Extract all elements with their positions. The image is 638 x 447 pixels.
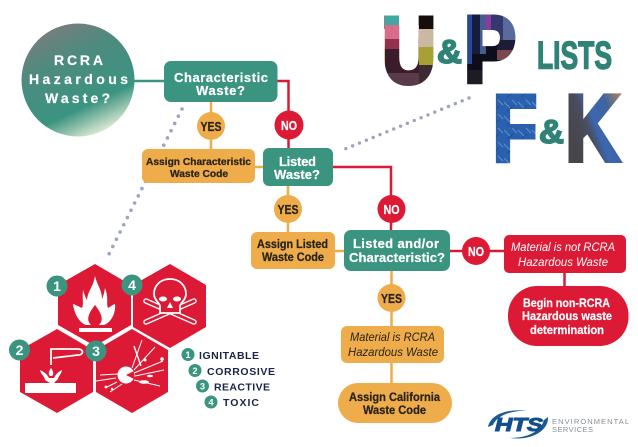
number badge 2 bbox=[9, 340, 30, 360]
number badge 1 bbox=[46, 276, 68, 296]
legend item: reactive: REACTIVE bbox=[214, 382, 270, 394]
red connectors bbox=[277, 81, 564, 287]
heading: F & K: & bbox=[539, 113, 564, 150]
legend item: reactive bbox=[196, 380, 270, 394]
next step: Assign California Waste Code: Waste Code bbox=[363, 403, 426, 417]
no badge 1: NO bbox=[281, 118, 297, 133]
decision: Characteristic Waste? bbox=[164, 61, 278, 102]
dotted leader: lists bbox=[345, 98, 469, 149]
decision: Listed Waste?: Listed bbox=[279, 154, 316, 169]
hexagon: ignitable bbox=[58, 264, 131, 346]
action: Assign Characteristic Waste Code: Assign Characteristic bbox=[146, 156, 251, 168]
next step: Begin non-RCRA determination: determination bbox=[530, 323, 604, 337]
start circle: RCRA Hazardous Waste? bbox=[22, 24, 134, 136]
legend bbox=[182, 348, 275, 409]
legend item: ignitable bbox=[182, 348, 259, 362]
legend item: toxic: 4 bbox=[208, 398, 214, 408]
start circle: RCRA Hazardous Waste?: Hazardous bbox=[29, 71, 128, 87]
no badge 3 bbox=[462, 237, 490, 265]
number badge 3 bbox=[86, 340, 106, 362]
next step: Begin non-RCRA determination: Begin non-RCRA bbox=[523, 296, 610, 310]
orange connectors bbox=[211, 102, 392, 384]
legend item: reactive: 3 bbox=[200, 382, 205, 392]
teal connector: start to characteristic bbox=[133, 80, 165, 82]
next step: Assign California Waste Code: Assign California bbox=[349, 390, 440, 404]
result: Material is not RCRA Hazardous Waste bbox=[504, 235, 626, 273]
heading: U & P Lists: U bbox=[382, 0, 436, 102]
yes badge 2: YES bbox=[278, 202, 299, 217]
number badge 2: 2 bbox=[16, 342, 24, 358]
action: Assign Listed Waste Code: Assign Listed bbox=[257, 237, 328, 251]
no badge 2: NO bbox=[384, 202, 400, 217]
action: Assign Characteristic Waste Code bbox=[142, 149, 255, 183]
yes badge 3: YES bbox=[381, 291, 402, 306]
logo: HTS Environmental Services: ENVIRONMENTAL bbox=[552, 417, 629, 426]
no badge 2 bbox=[378, 195, 406, 223]
result: Material is not RCRA Hazardous Waste: Hazardous Waste bbox=[518, 255, 608, 269]
heading: U & P Lists: & bbox=[437, 33, 462, 70]
logo: HTS Environmental Services: HTS bbox=[495, 415, 543, 435]
action: Assign Listed Waste Code bbox=[251, 232, 335, 269]
no badge 3: NO bbox=[468, 244, 484, 259]
hexagon: reactive bbox=[96, 329, 168, 413]
decision: Listed Waste? bbox=[263, 148, 333, 186]
decision: Characteristic Waste?: Characteristic bbox=[174, 70, 268, 85]
result: Material is not RCRA Hazardous Waste: Material is not RCRA bbox=[511, 240, 615, 254]
result: Material is RCRA Hazardous Waste: Hazardous Waste bbox=[348, 345, 438, 359]
number badge 3: 3 bbox=[92, 343, 100, 359]
start circle: RCRA Hazardous Waste?: RCRA bbox=[54, 52, 103, 68]
decision: Listed and/or Characteristic? bbox=[344, 230, 450, 271]
decision: Listed Waste?: Waste? bbox=[274, 167, 320, 182]
heading: F & K: F bbox=[493, 76, 537, 180]
hazard hexagons bbox=[20, 264, 206, 413]
no badge 1 bbox=[274, 110, 304, 140]
action: Assign Listed Waste Code: Waste Code bbox=[262, 250, 324, 264]
yes badge 2 bbox=[274, 195, 302, 223]
result: Material is RCRA Hazardous Waste bbox=[341, 326, 444, 363]
decision: Listed and/or Characteristic?: Listed and/or bbox=[353, 236, 439, 251]
decision: Characteristic Waste?: Waste? bbox=[196, 83, 245, 98]
start circle: RCRA Hazardous Waste?: Waste? bbox=[45, 90, 110, 106]
yes badge 1 bbox=[197, 112, 225, 140]
yes badge 1: YES bbox=[200, 119, 222, 134]
legend item: toxic: TOXIC bbox=[223, 397, 259, 409]
action: Assign Characteristic Waste Code: Waste Code bbox=[170, 168, 228, 180]
number badge 4 bbox=[122, 274, 142, 296]
heading: F & K bbox=[493, 76, 620, 180]
hexagon: corrosive bbox=[20, 329, 93, 413]
hexagon: toxic bbox=[133, 264, 206, 348]
logo: HTS Environmental Services: SERVICES bbox=[552, 425, 593, 434]
yes badge 3 bbox=[378, 284, 406, 312]
result: Material is RCRA Hazardous Waste: Material is RCRA bbox=[350, 330, 435, 344]
next step: Begin non-RCRA determination: Hazardous waste bbox=[522, 309, 612, 323]
decision: Listed and/or Characteristic?: Characteristic? bbox=[349, 250, 445, 265]
legend item: corrosive: CORROSIVE bbox=[207, 366, 275, 378]
heading: U & P Lists bbox=[382, 0, 612, 102]
legend item: ignitable: 1 bbox=[185, 350, 191, 360]
dotted leader: hazardous characteristics bbox=[108, 109, 182, 256]
logo: HTS Environmental Services bbox=[488, 410, 629, 438]
legend item: toxic bbox=[204, 396, 259, 409]
legend item: ignitable: IGNITABLE bbox=[199, 350, 259, 362]
number badge 4: 4 bbox=[128, 277, 136, 293]
next step: Assign California Waste Code bbox=[338, 383, 452, 423]
legend item: corrosive: 2 bbox=[192, 366, 198, 376]
heading: F & K: K bbox=[566, 76, 620, 180]
next step: Begin non-RCRA determination bbox=[508, 286, 628, 346]
legend item: corrosive bbox=[188, 364, 275, 378]
number badge 1: 1 bbox=[53, 278, 61, 294]
